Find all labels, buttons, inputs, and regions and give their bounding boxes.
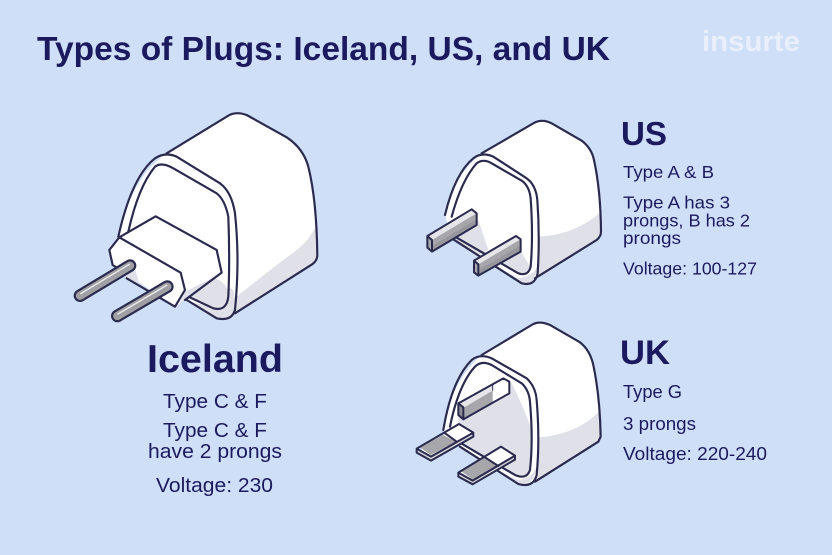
text: UK details: Type G [623,381,682,402]
text: US details: Voltage: 100-127 [623,258,757,278]
text: Iceland details [148,390,282,497]
prong: left [417,424,473,461]
prong: left [427,209,477,252]
text: Iceland details: Voltage: 230 [156,474,273,497]
prong: bottom [458,447,515,484]
icon: Iceland plug [80,113,317,319]
heading: US: US [621,115,667,152]
plug base [109,216,222,307]
text: US details [623,162,757,278]
icon: US plug [427,121,601,284]
text: UK details [623,381,767,464]
text: UK details: Voltage: 220-240 [623,443,767,464]
prong: right [474,236,521,276]
text: UK details: 3 prongs [623,413,696,434]
text: Iceland details: Type C & F [163,390,267,413]
text: US details: prongs [623,228,681,248]
prong: top [458,378,509,419]
text: Iceland details: have 2 prongs [148,440,282,463]
logo: insurte [702,26,800,58]
text: Iceland details: Type C & F [163,419,267,442]
text: US details: prongs, B has 2 [623,210,750,230]
title: Types of Plugs: Iceland, US, and UK [37,30,610,67]
icon: UK plug [417,323,601,485]
heading: UK: UK [620,334,670,372]
prong: right [117,285,167,316]
prong: left [80,264,130,296]
text: US details: Type A has 3 [623,192,730,212]
text: US details: Type A & B [623,162,714,182]
heading: Iceland: Iceland [147,338,283,381]
